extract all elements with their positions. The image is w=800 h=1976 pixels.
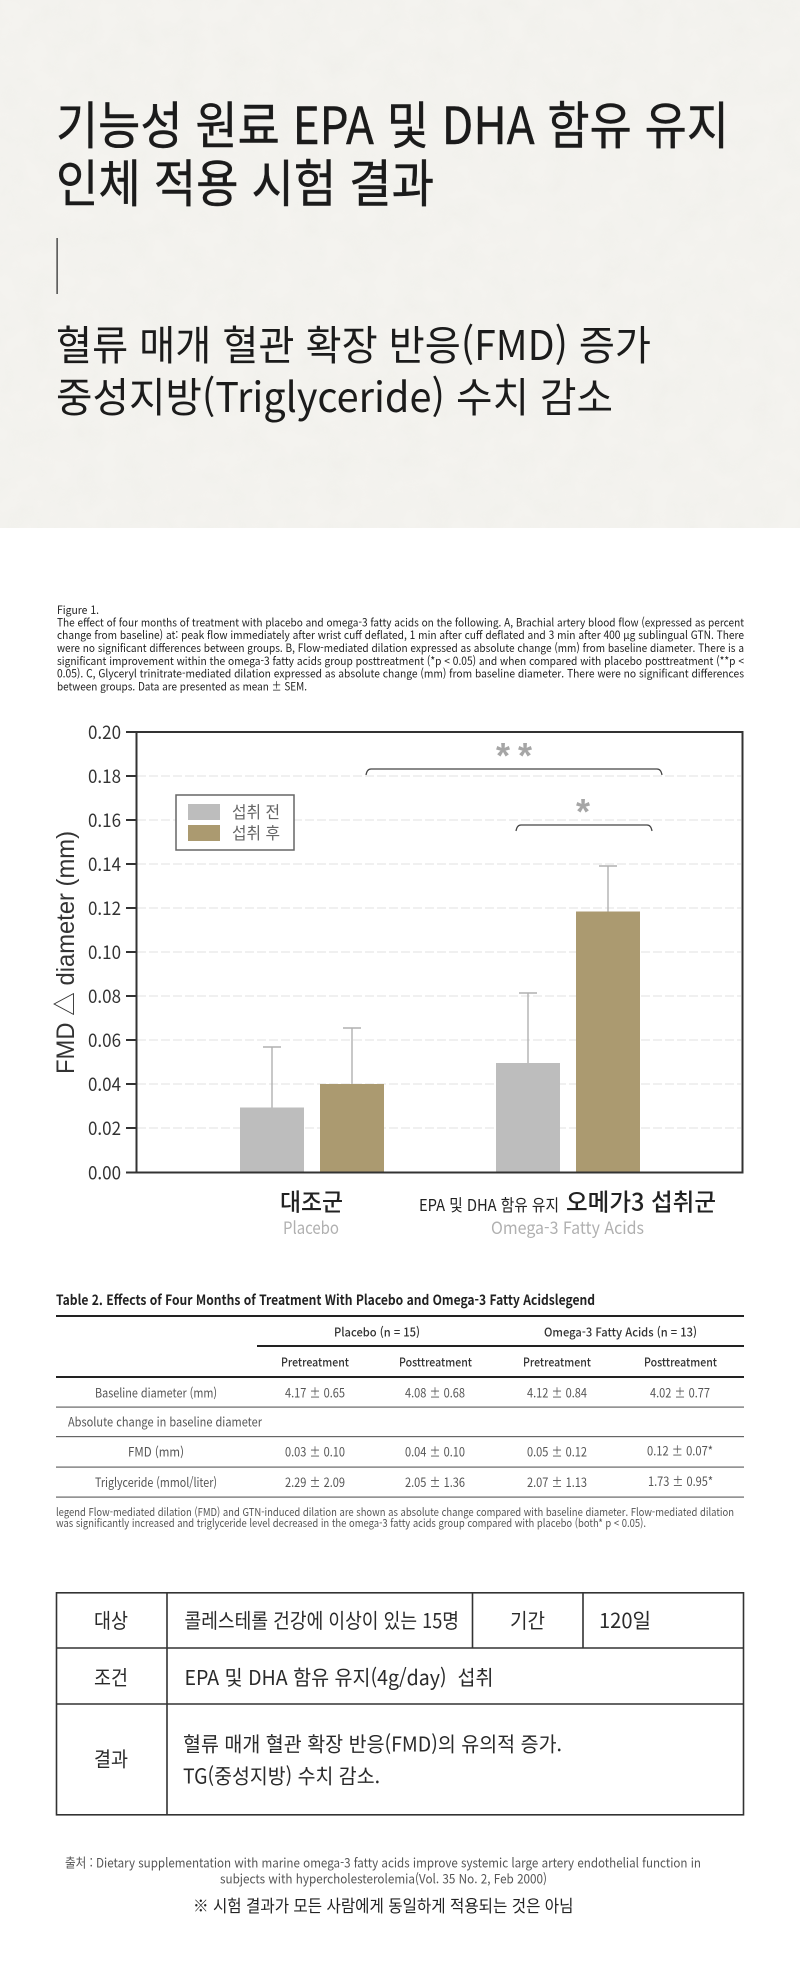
bar chart: FMD change in diameter	[52, 719, 742, 1239]
table row: triglyceride: 1.73 ± 0.95*	[648, 1471, 713, 1490]
y axis tick labels: 0.20	[88, 719, 121, 745]
table row: triglyceride	[95, 1471, 713, 1491]
text block: figure caption: between groups. Data are presented as mean ± SEM.	[57, 678, 307, 694]
bars	[240, 912, 640, 1172]
y axis tick labels: 0.14	[88, 851, 121, 877]
row: subject and period: 대상	[94, 1604, 128, 1634]
x label: omega-3 group: Omega-3 Fatty Acids	[491, 1214, 644, 1239]
subtitle: 혈류 매개 혈관 확장 반응(FMD) 증가	[56, 312, 651, 372]
text block: figure caption: 0.05). C, Glyceryl trinitrate-mediated dilation expressed as absolute change (mm) from baseline diameter. There were no significant differences	[57, 666, 744, 682]
title: 기능성 원료 EPA 및 DHA 함유 유지	[56, 85, 729, 159]
legend: 섭취 전	[232, 799, 280, 823]
table rules	[56, 1315, 744, 1498]
table row: baseline diameter: Baseline diameter (mm)	[95, 1382, 217, 1402]
table row: FMD	[128, 1440, 713, 1460]
table legend note	[56, 1504, 734, 1531]
y axis tick labels: 0.10	[88, 939, 121, 965]
table row: baseline diameter: 4.02 ± 0.77	[650, 1382, 710, 1402]
table row: FMD: 0.12 ± 0.07*	[647, 1440, 713, 1460]
row: subject and period: 콜레스테롤 건강에 이상이 있는 15명	[184, 1604, 459, 1634]
vertical divider line	[56, 238, 58, 294]
table row: baseline diameter: 4.08 ± 0.68	[405, 1382, 465, 1402]
summary table grid	[56, 1593, 744, 1815]
y axis tick labels: 0.02	[88, 1115, 121, 1141]
row: result: 결과	[94, 1742, 128, 1772]
text block: figure caption: significant improvement within the omega-3 fatty acids group posttreatment (*p < 0.05) and when compared with placebo posttreatment (**p <	[57, 653, 744, 669]
significance bracket: *	[516, 791, 652, 832]
x label: placebo group	[280, 1182, 343, 1239]
table row: absolute change: Absolute change in baseline diameter	[68, 1412, 262, 1430]
row: condition: 조건	[94, 1661, 128, 1691]
x label: omega-3 group: EPA 및 DHA 함유 유지	[419, 1192, 559, 1216]
table row: FMD: 0.03 ± 0.10	[285, 1442, 345, 1460]
table row: triglyceride: 2.07 ± 1.13	[527, 1472, 587, 1491]
y axis tick labels: 0.04	[88, 1071, 121, 1097]
plot frame and ticks	[126, 732, 742, 1172]
text block: figure caption: Figure 1.	[57, 602, 99, 618]
source citation	[65, 1852, 701, 1888]
title	[56, 85, 729, 217]
legend: 섭취 후	[232, 820, 280, 844]
table row: triglyceride: Triglyceride (mmol/liter)	[95, 1472, 217, 1491]
significance bracket: **	[366, 735, 662, 776]
y axis tick labels: 0.16	[88, 807, 121, 833]
error bars	[263, 866, 617, 1108]
significance bracket: **: **	[496, 735, 532, 776]
table header	[281, 1324, 717, 1370]
y axis tick labels	[88, 719, 121, 1186]
table row: FMD: FMD (mm)	[128, 1442, 184, 1460]
table header: Pretreatment	[523, 1354, 591, 1370]
table title: Table 2. Effects of Four Months of Treatment With Placebo and Omega-3 Fatty Acidslegend	[56, 1290, 595, 1310]
table row: FMD: 0.04 ± 0.10	[405, 1442, 465, 1460]
text block: figure caption: The effect of four months of treatment with placebo and omega-3 fatty acids on the following. A, Brachial artery blood flow (expressed as percent	[57, 614, 745, 630]
y axis tick labels: 0.18	[88, 763, 121, 789]
table row: baseline diameter: 4.17 ± 0.65	[285, 1382, 345, 1402]
row: result: 혈류 매개 혈관 확장 반응(FMD)의 유의적 증가.	[183, 1728, 562, 1758]
x label: placebo group: 대조군	[280, 1182, 343, 1218]
table header: Pretreatment	[281, 1354, 349, 1370]
table: effects of four months of treatment	[56, 1290, 744, 1531]
table header: Posttreatment	[399, 1354, 472, 1370]
x label: placebo group: Placebo	[283, 1214, 339, 1239]
x label: omega-3 group: 오메가3 섭취군	[566, 1182, 716, 1218]
source citation: subjects with hypercholesterolemia(Vol. 35 No. 2, Feb 2000)	[220, 1868, 547, 1888]
y axis tick labels: 0.08	[88, 983, 121, 1009]
source citation: 출처 : Dietary supplementation with marine omega-3 fatty acids improve systemic large artery endothelial function in	[65, 1852, 701, 1872]
table row: baseline diameter	[95, 1382, 710, 1402]
text block: figure caption	[57, 602, 745, 694]
table row: baseline diameter: 4.12 ± 0.84	[527, 1382, 587, 1402]
table legend note: was significantly increased and triglyceride level decreased in the omega-3 fatty acids group compared with placebo (both* p < 0.05).	[56, 1515, 646, 1531]
text block: figure caption: change from baseline) at: peak flow immediately after wrist cuff deflated, 1 min after cuff deflated and 3 min after 400 μg sublingual GTN. There	[57, 627, 744, 643]
y axis tick labels: 0.12	[88, 895, 121, 921]
disclaimer note: ※ 시험 결과가 모든 사람에게 동일하게 적용되는 것은 아님	[193, 1892, 574, 1917]
table header: Posttreatment	[644, 1354, 717, 1370]
row: condition: EPA 및 DHA 함유 유지(4g/day) 섭취	[184, 1661, 494, 1691]
legend	[176, 795, 294, 850]
subtitle: 중성지방(Triglyceride) 수치 감소	[56, 364, 613, 424]
panel: textured header background	[0, 0, 800, 528]
table row: triglyceride: 2.05 ± 1.36	[405, 1472, 465, 1491]
row: result: TG(중성지방) 수치 감소.	[183, 1760, 380, 1790]
row: subject and period	[94, 1604, 651, 1634]
table row: triglyceride: 2.29 ± 2.09	[285, 1472, 345, 1491]
panel: study summary table	[56, 1593, 744, 1815]
table header: Placebo (n = 15)	[334, 1324, 420, 1340]
subtitle	[56, 312, 651, 424]
table header: Omega-3 Fatty Acids (n = 13)	[544, 1324, 697, 1340]
row: result	[94, 1728, 562, 1790]
y axis tick labels: 0.00	[88, 1160, 121, 1186]
y axis title: FMD △ diameter (mm)	[52, 831, 80, 1074]
table row: FMD: 0.05 ± 0.12	[527, 1442, 587, 1460]
row: subject and period: 기간	[510, 1604, 545, 1634]
grid lines	[137, 776, 741, 1128]
x label: omega-3 group	[419, 1182, 716, 1239]
significance bracket: *: *	[576, 791, 590, 832]
title: 인체 적용 시험 결과	[56, 143, 434, 217]
y axis tick labels: 0.06	[88, 1027, 121, 1053]
text block: figure caption: were no significant differences between groups. B, Flow-mediated dilation expressed as absolute change (mm) from baseline diameter. There is a	[57, 640, 744, 656]
row: subject and period: 120일	[599, 1604, 651, 1634]
